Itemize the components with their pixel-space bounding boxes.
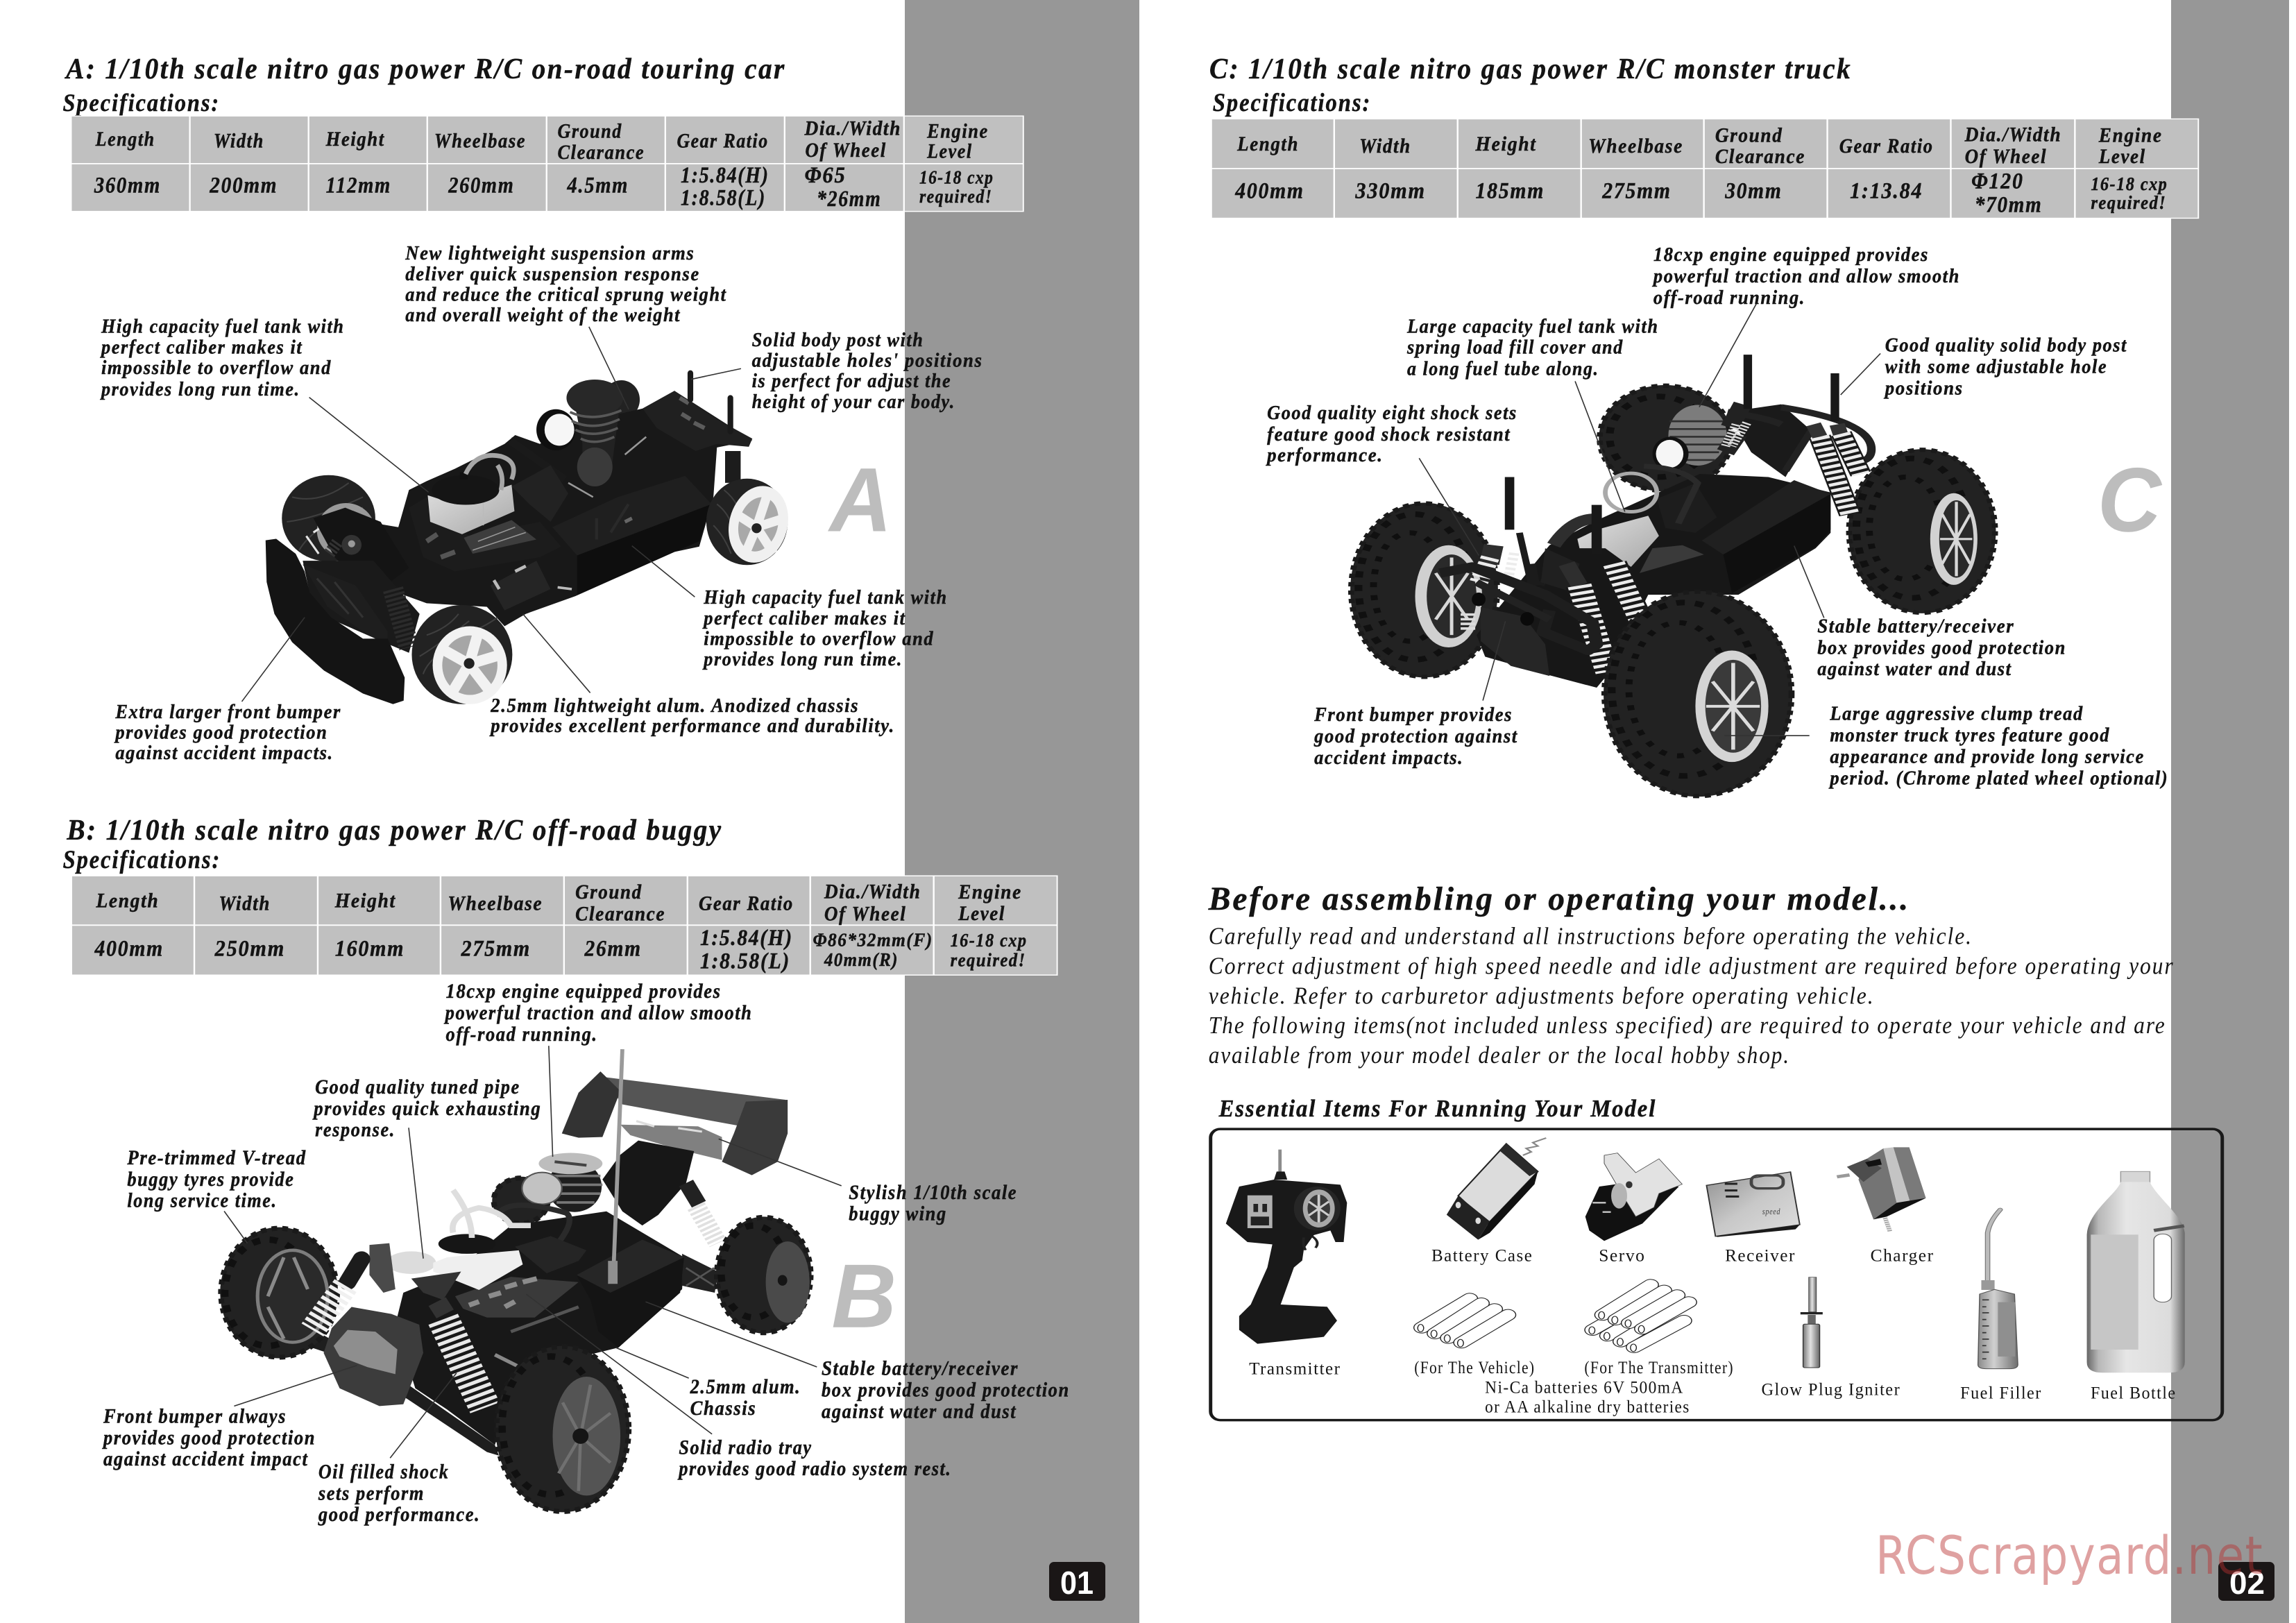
- spec table A: Engine: [926, 120, 989, 143]
- callout: fuel tank: spring load fill cover and: [1406, 336, 1624, 358]
- icon: fuel bottle: [2087, 1171, 2185, 1373]
- section B: [63, 814, 1070, 1526]
- callout: battery box: Stable battery/receiver: [822, 1357, 1019, 1380]
- spec table B: Length: [96, 890, 159, 912]
- callout: alum chassis: 2.5mm alum.: [690, 1375, 801, 1398]
- spec table A: Level: [926, 140, 973, 162]
- spec table B: 1:8.58(L): [700, 949, 790, 974]
- item labels: or AA alkaline dry batteries: [1485, 1397, 1690, 1416]
- gray side band: page 2: [2171, 0, 2289, 1623]
- spec table B: Ground: [575, 881, 643, 903]
- spec table B: Height: [334, 890, 396, 912]
- item labels: Glow Plug Igniter: [1761, 1380, 1900, 1399]
- callout: engine: powerful traction and allow smooth: [443, 1001, 753, 1024]
- callout: shocks: Good quality eight shock sets: [1267, 402, 1517, 424]
- callout: fuel tank left: perfect caliber makes it: [100, 337, 303, 358]
- callout: wing: buggy wing: [849, 1202, 947, 1225]
- item labels: Servo: [1599, 1246, 1645, 1265]
- spec table C: required!: [2091, 193, 2166, 214]
- icon: receiver: [1706, 1172, 1800, 1237]
- callout: bumper: Front bumper provides: [1313, 704, 1513, 726]
- spec table A: 360mm: [94, 173, 161, 198]
- callout: engine: 18cxp engine equipped provides: [446, 980, 722, 1003]
- specifications label B: Specifications:: [63, 846, 221, 874]
- callout: chassis: provides excellent performance and durability.: [489, 715, 895, 737]
- spec table B: Dia./Width: [824, 881, 921, 903]
- specifications label A: Specifications:: [63, 90, 220, 117]
- callout: front bumper: Extra larger front bumper: [115, 701, 341, 723]
- callout: shocks: performance.: [1266, 444, 1384, 466]
- spec table A: 1:5.84(H): [681, 163, 769, 188]
- spec table A: required!: [919, 185, 992, 207]
- spec table C: 1:13.84: [1850, 179, 1923, 203]
- spec table B: 275mm: [461, 937, 531, 961]
- gray side band: page 1: [905, 0, 1139, 1623]
- spec table A: 4.5mm: [567, 173, 629, 198]
- callout: wing: [849, 1180, 1017, 1225]
- item labels: Ni-Ca batteries 6V 500mA: [1485, 1378, 1684, 1397]
- essential item icons, right group: [1706, 1147, 2185, 1373]
- item labels: Charger: [1871, 1246, 1934, 1265]
- callout: suspension arms: [405, 242, 727, 326]
- callout: tuned pipe: response.: [315, 1118, 396, 1141]
- callout: body post: Solid body post with: [752, 329, 924, 351]
- callout: battery box: Stable battery/receiver: [1817, 615, 2014, 637]
- callout: engine: [443, 980, 753, 1046]
- callout: front bumper: provides good protection: [114, 722, 328, 743]
- page number badge 01: 01: [1060, 1565, 1094, 1601]
- callout: bumper: [1313, 704, 1518, 769]
- callout: engine: powerful traction and allow smooth: [1652, 265, 1960, 287]
- callout: oil shocks: Oil filled shock: [318, 1460, 449, 1483]
- callout: fuel tank: Large capacity fuel tank with: [1406, 315, 1659, 337]
- spec table A: 112mm: [326, 173, 391, 198]
- car A: on-road touring car: [266, 373, 797, 704]
- spec table C: Φ120: [1971, 169, 2024, 194]
- callout: radio tray: [677, 1436, 951, 1480]
- callout: tyres: Pre-trimmed V-tread: [127, 1146, 307, 1169]
- icon: servo: [1585, 1153, 1682, 1241]
- instructions paragraph: vehicle. Refer to carburetor adjustments before operating vehicle.: [1209, 983, 1875, 1010]
- callout: radio tray: Solid radio tray: [679, 1436, 813, 1459]
- spec table C: Gear Ratio: [1839, 135, 1934, 157]
- spec table A: Wheelbase: [434, 130, 526, 153]
- icon: receiver: speed: [1762, 1207, 1780, 1216]
- page number badge 02: [2218, 1562, 2274, 1601]
- spec table A: *26mm: [817, 187, 881, 212]
- icon: glow plug igniter: [1801, 1277, 1823, 1368]
- item labels: Fuel Filler: [1960, 1383, 2042, 1402]
- spec table B: 400mm: [94, 937, 164, 961]
- callout: front bumper: against accident impacts.: [115, 742, 334, 764]
- page number badge 01: [1049, 1562, 1105, 1601]
- callout: engine: 18cxp engine equipped provides: [1653, 244, 1929, 266]
- spec table B: Wheelbase: [448, 892, 543, 915]
- icon: fuel filler: [1978, 1209, 2018, 1369]
- callout: battery box: box provides good protection: [822, 1378, 1070, 1401]
- callout: suspension arms: deliver quick suspension response: [405, 263, 700, 285]
- callout: radio tray: provides good radio system rest.: [677, 1456, 951, 1480]
- letter C: C: [2098, 450, 2163, 551]
- callout: fuel tank right: provides long run time.: [702, 648, 903, 670]
- spec table C: 330mm: [1355, 179, 1426, 203]
- heading A: A: 1/10th scale nitro gas power R/C on-road touring car: [65, 53, 786, 85]
- essential item icons, left group: [1226, 1138, 1689, 1352]
- section C: [1209, 53, 2198, 789]
- callout: battery box: [822, 1357, 1070, 1422]
- callout: bumper: Front bumper always: [103, 1404, 287, 1427]
- item labels: Receiver: [1725, 1246, 1796, 1265]
- leader lines B: [224, 1046, 842, 1458]
- item labels: Transmitter: [1249, 1359, 1341, 1378]
- callout: body post: [1883, 334, 2127, 399]
- callout: body post: Good quality solid body post: [1885, 334, 2127, 356]
- callout: oil shocks: good performance.: [318, 1502, 480, 1526]
- letter A: A: [827, 449, 892, 551]
- spec table C: 30mm: [1724, 179, 1783, 203]
- callout: fuel tank right: perfect caliber makes it: [702, 607, 906, 629]
- callout: engine: off-road running.: [1653, 287, 1805, 309]
- spec table B: Φ86*32mm(F): [813, 929, 933, 950]
- spec table A: Clearance: [557, 141, 645, 164]
- callout: battery box: against water and dust: [1817, 658, 2012, 680]
- callout: battery box: [1817, 615, 2066, 680]
- callout: bumper: [102, 1404, 316, 1470]
- spec table B: Gear Ratio: [699, 892, 794, 915]
- spec table A: 260mm: [448, 173, 515, 198]
- callout: fuel tank right: High capacity fuel tank with: [704, 586, 948, 609]
- spec table B: 26mm: [584, 937, 642, 961]
- callout: fuel tank left: High capacity fuel tank with: [101, 316, 344, 337]
- spec table B: Width: [219, 892, 271, 915]
- heading: before assembling: Before assembling or operating your model...: [1208, 881, 1910, 917]
- spec table C: Level: [2098, 145, 2146, 168]
- spec table A: 1:8.58(L): [681, 185, 766, 210]
- callout: fuel tank left: impossible to overflow and: [101, 357, 332, 379]
- callout: suspension arms: and reduce the critical sprung weight: [405, 284, 727, 306]
- callout: battery box: box provides good protection: [1817, 636, 2066, 658]
- spec table B: Clearance: [575, 903, 665, 926]
- page number badge 02: 02: [2229, 1565, 2265, 1601]
- callout: chassis: [489, 695, 895, 737]
- spec table A: Φ65: [804, 163, 847, 188]
- callout: tyres: monster truck tyres feature good: [1830, 724, 2110, 746]
- spec table B: required!: [951, 950, 1026, 971]
- callout: body post: positions: [1883, 377, 1964, 399]
- spec table B: Engine: [958, 881, 1022, 903]
- spec table C: Wheelbase: [1588, 135, 1683, 157]
- callout: shocks: [1266, 402, 1517, 466]
- callout: fuel tank left: provides long run time.: [100, 378, 300, 400]
- callout: suspension arms: and overall weight of the weight: [405, 304, 681, 326]
- instructions paragraph: available from your model dealer or the local hobby shop.: [1209, 1042, 1790, 1069]
- callout: shocks: feature good shock resistant: [1267, 423, 1511, 445]
- icon: batteries for the vehicle: [1418, 1299, 1508, 1347]
- callout: tyres: [1828, 703, 2168, 789]
- callout: alum chassis: [690, 1375, 801, 1420]
- spec table A: Ground: [557, 120, 622, 143]
- spec table A: Width: [214, 130, 264, 153]
- spec table C: 400mm: [1234, 179, 1304, 203]
- callout: tuned pipe: provides quick exhausting: [312, 1096, 541, 1120]
- callout: body post: height of your car body.: [752, 391, 955, 413]
- callout: tyres: Large aggressive clump tread: [1830, 703, 2084, 724]
- item labels: (For The Vehicle): [1414, 1358, 1535, 1377]
- spec table C: Clearance: [1715, 145, 1805, 168]
- callout: fuel tank left: [100, 316, 344, 400]
- spec table C: Engine: [2098, 124, 2163, 146]
- spec table B: 250mm: [214, 937, 285, 961]
- callout: front bumper: [114, 701, 341, 764]
- callout: engine: [1652, 244, 1960, 309]
- item labels: Battery Case: [1431, 1246, 1533, 1265]
- callout: oil shocks: sets perform: [318, 1481, 425, 1504]
- item labels: [1249, 1246, 2177, 1416]
- spec table A: Height: [325, 128, 385, 151]
- essential items heading: Essential Items For Running Your Model: [1218, 1096, 1656, 1122]
- spec table B: 40mm(R): [824, 949, 899, 970]
- truck C: monster truck: [1350, 355, 1996, 797]
- callout: body post: is perfect for adjust the: [752, 370, 951, 392]
- spec table A: Dia./Width: [804, 117, 901, 139]
- callout: tuned pipe: Good quality tuned pipe: [315, 1075, 520, 1098]
- icon: battery case: [1447, 1138, 1546, 1240]
- callout: battery box: against water and dust: [822, 1400, 1017, 1422]
- section: before assembling: [1208, 881, 2222, 1420]
- spec table B: 160mm: [335, 937, 405, 961]
- car B: off-road buggy: [220, 1049, 812, 1512]
- callout: bumper: good protection against: [1313, 725, 1518, 747]
- callout: fuel tank right: impossible to overflow and: [704, 628, 934, 650]
- spec table B: Level: [958, 903, 1005, 925]
- leader lines C: [1419, 304, 1880, 736]
- callout: alum chassis: Chassis: [690, 1396, 756, 1420]
- callout: suspension arms: New lightweight suspension arms: [405, 242, 695, 264]
- specifications label C: Specifications:: [1213, 89, 1371, 117]
- spec table C: Of Wheel: [1965, 145, 2047, 168]
- spec table C: 16-18 cxp: [2091, 173, 2168, 194]
- spec table A: 16-18 cxp: [919, 167, 994, 188]
- spec table C: Ground: [1715, 124, 1783, 146]
- spec table A: [71, 116, 1023, 212]
- spec table B: Of Wheel: [824, 903, 906, 926]
- spec table C: 275mm: [1601, 179, 1672, 203]
- spec table A: Gear Ratio: [677, 130, 769, 153]
- spec table C: [1211, 119, 2198, 218]
- letter B: B: [831, 1246, 896, 1347]
- spec table C: Length: [1236, 133, 1299, 155]
- callout: body post: with some adjustable hole: [1885, 355, 2107, 377]
- callout: tyres: buggy tyres provide: [127, 1167, 294, 1191]
- spec table C: Height: [1475, 133, 1537, 155]
- spec table A: 200mm: [209, 173, 278, 198]
- callout: fuel tank: [1406, 315, 1659, 380]
- essential items box: [1211, 1129, 2222, 1420]
- instructions paragraph: [1209, 923, 2175, 1069]
- callout: fuel tank right: [702, 586, 948, 670]
- spec table C: Dia./Width: [1964, 124, 2061, 146]
- item labels: Fuel Bottle: [2091, 1383, 2177, 1402]
- callout: body post: adjustable holes' positions: [752, 350, 983, 371]
- callout: tyres: long service time.: [127, 1189, 278, 1212]
- callout: engine: off-road running.: [446, 1022, 598, 1046]
- callout: bumper: provides good protection: [102, 1426, 316, 1449]
- section A: [63, 53, 1023, 764]
- item labels: (For The Transmitter): [1584, 1358, 1734, 1377]
- spec table B: [71, 876, 1057, 975]
- spec table A: Length: [95, 128, 155, 151]
- icon: batteries for the transmitter: [1589, 1285, 1689, 1352]
- callout: oil shocks: [318, 1460, 480, 1526]
- callout: tyres: appearance and provide long service: [1830, 745, 2145, 767]
- spec table C: *70mm: [1975, 193, 2042, 217]
- icon: transmitter: [1226, 1150, 1347, 1344]
- spec table B: 16-18 cxp: [951, 930, 1028, 951]
- spec table B: 1:5.84(H): [700, 926, 793, 951]
- callout: fuel tank: a long fuel tube along.: [1407, 357, 1599, 380]
- heading B: B: 1/10th scale nitro gas power R/C off-road buggy: [67, 814, 722, 847]
- callout: wing: Stylish 1/10th scale: [849, 1180, 1017, 1204]
- icon: charger: [1837, 1147, 1926, 1232]
- callout: bumper: against accident impact: [103, 1447, 309, 1470]
- callout: tyres: [127, 1146, 307, 1212]
- callout: body post: [752, 329, 983, 413]
- spec table A: Of Wheel: [805, 139, 887, 162]
- leader lines A: [242, 327, 741, 702]
- spec table C: 185mm: [1476, 179, 1545, 203]
- callout: tuned pipe: [312, 1075, 541, 1141]
- callout: chassis: 2.5mm lightweight alum. Anodized chassis: [490, 695, 859, 717]
- heading C: C: 1/10th scale nitro gas power R/C monster truck: [1209, 53, 1852, 85]
- spec table C: Width: [1359, 135, 1411, 157]
- callout: bumper: accident impacts.: [1314, 747, 1463, 769]
